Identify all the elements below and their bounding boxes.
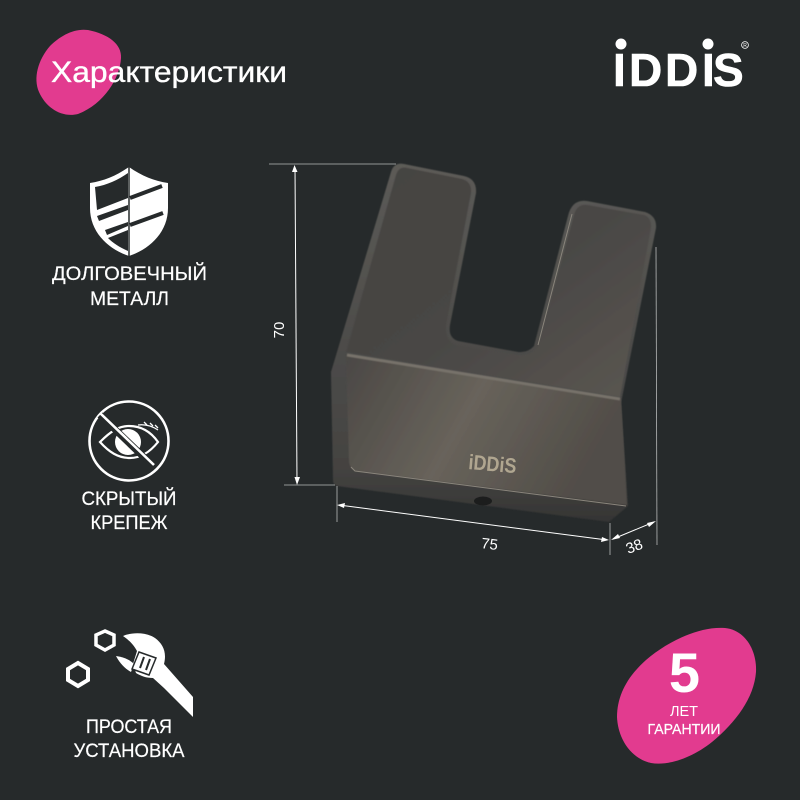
feature: durable metal: МЕТАЛЛ: [90, 288, 169, 310]
hook outer body: [331, 164, 656, 522]
label: простая установка: ПРОСТАЯ: [86, 716, 172, 738]
warranty badge: ЛЕТ: [670, 704, 698, 720]
dimension: width 75: [337, 486, 610, 555]
fold highlight: [347, 355, 620, 399]
dimension: depth 38: [611, 247, 657, 558]
dimension: width 75: 75: [480, 535, 499, 554]
feature: hidden fastening: [82, 402, 176, 534]
inner edge highlight: [538, 214, 572, 345]
dimension: depth 38: 38: [624, 536, 645, 558]
heading: Характеристики with pink blob: [36, 30, 287, 115]
warranty badge: [617, 628, 756, 764]
icon: nuts and wrench: [68, 631, 193, 717]
heading: Характеристики with pink blob: Характеристики: [51, 56, 287, 89]
logo: IDDIS: R: [743, 43, 747, 49]
label: долговечный металл: ДОЛГОВЕЧНЫЙ: [52, 261, 207, 285]
product: wall hook: [331, 164, 656, 522]
dimension: height 70: 70: [271, 322, 288, 338]
warranty badge: 5: [669, 641, 700, 704]
feature: durable metal: [52, 167, 207, 310]
feature: hidden fastening: КРЕПЕЖ: [90, 512, 168, 534]
bottom highlight: [351, 467, 626, 506]
product logo: iDDiS: [468, 451, 517, 478]
hook front face: [346, 355, 627, 505]
logo: IDDIS: IDDIS: [613, 44, 744, 96]
icon: crossed eye: [90, 402, 168, 480]
feature: easy installation: [68, 631, 193, 762]
dimension: height 70: [269, 164, 396, 485]
warranty badge: ГАРАНТИИ: [648, 722, 720, 738]
label: скрытый крепеж: СКРЫТЫЙ: [82, 486, 176, 510]
feature: easy installation: УСТАНОВКА: [74, 740, 184, 762]
hook top face: [346, 168, 651, 397]
screw: [474, 496, 492, 506]
icon: shield: [90, 167, 168, 256]
